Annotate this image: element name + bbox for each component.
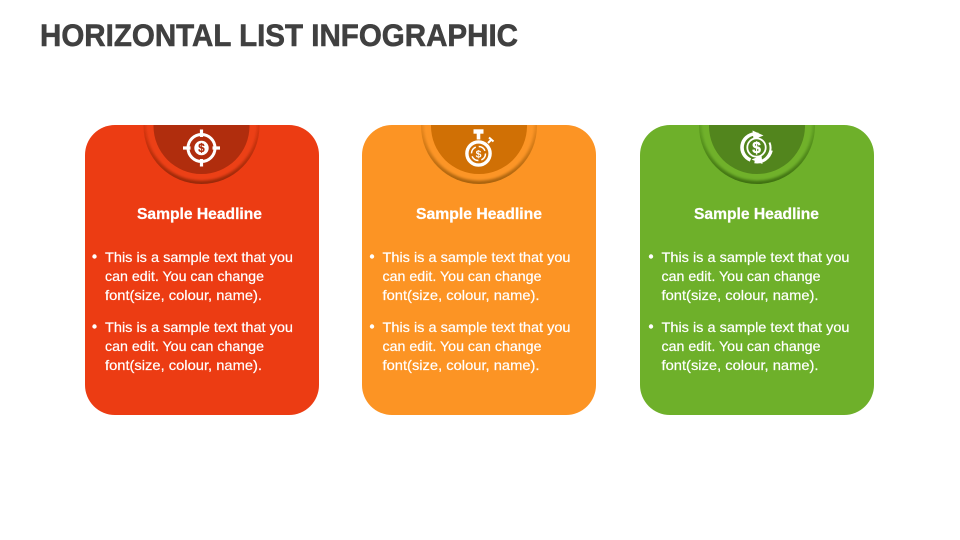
text block: red card: can edit. You can change [105,268,264,284]
text block: red card: This is a sample text that you [105,249,293,265]
panel: red card [85,125,319,415]
headline: orange card: Sample Headline [416,206,542,223]
icon: target with dollar [183,130,220,166]
text block: red card: font(size, colour, name). [105,287,262,303]
text block: orange card: font(size, colour, name). [382,287,540,303]
text block: orange card: can edit. You can change [382,268,542,284]
text block: green card: can edit. You can change [662,268,821,284]
badge: red half circle [144,125,260,184]
title: HORIZONTAL LIST INFOGRAPHIC [40,17,518,53]
text block: green card [649,249,850,373]
badge: green half circle [699,125,815,184]
text block: orange card: This is a sample text that you [382,249,570,265]
badge: orange half circle [421,125,537,184]
headline: red card: Sample Headline [137,206,262,223]
panel: green card [640,125,874,415]
text block: green card: This is a sample text that you [662,319,850,335]
text block: green card: This is a sample text that you [662,249,850,265]
text block: red card: This is a sample text that you [105,319,293,335]
text block: orange card [370,249,570,373]
text block: green card: font(size, colour, name). [662,287,818,303]
icon: stopwatch with dollar: $ [476,148,482,160]
icon: circular arrows with dollar: $ [752,140,761,157]
text block: orange card: can edit. You can change [382,338,542,354]
text block: red card: can edit. You can change [105,338,264,354]
text block: red card: font(size, colour, name). [105,357,262,373]
text block: orange card: font(size, colour, name). [382,357,540,373]
text block: green card: font(size, colour, name). [662,357,818,373]
icon: circular arrows with dollar [741,130,772,164]
text block: green card: can edit. You can change [662,338,821,354]
panel: orange card [362,125,596,415]
headline: green card: Sample Headline [694,206,819,223]
text block: orange card: This is a sample text that you [382,319,570,335]
text block: red card [92,249,293,373]
icon: stopwatch with dollar [467,129,494,165]
icon: target with dollar: $ [198,143,205,155]
